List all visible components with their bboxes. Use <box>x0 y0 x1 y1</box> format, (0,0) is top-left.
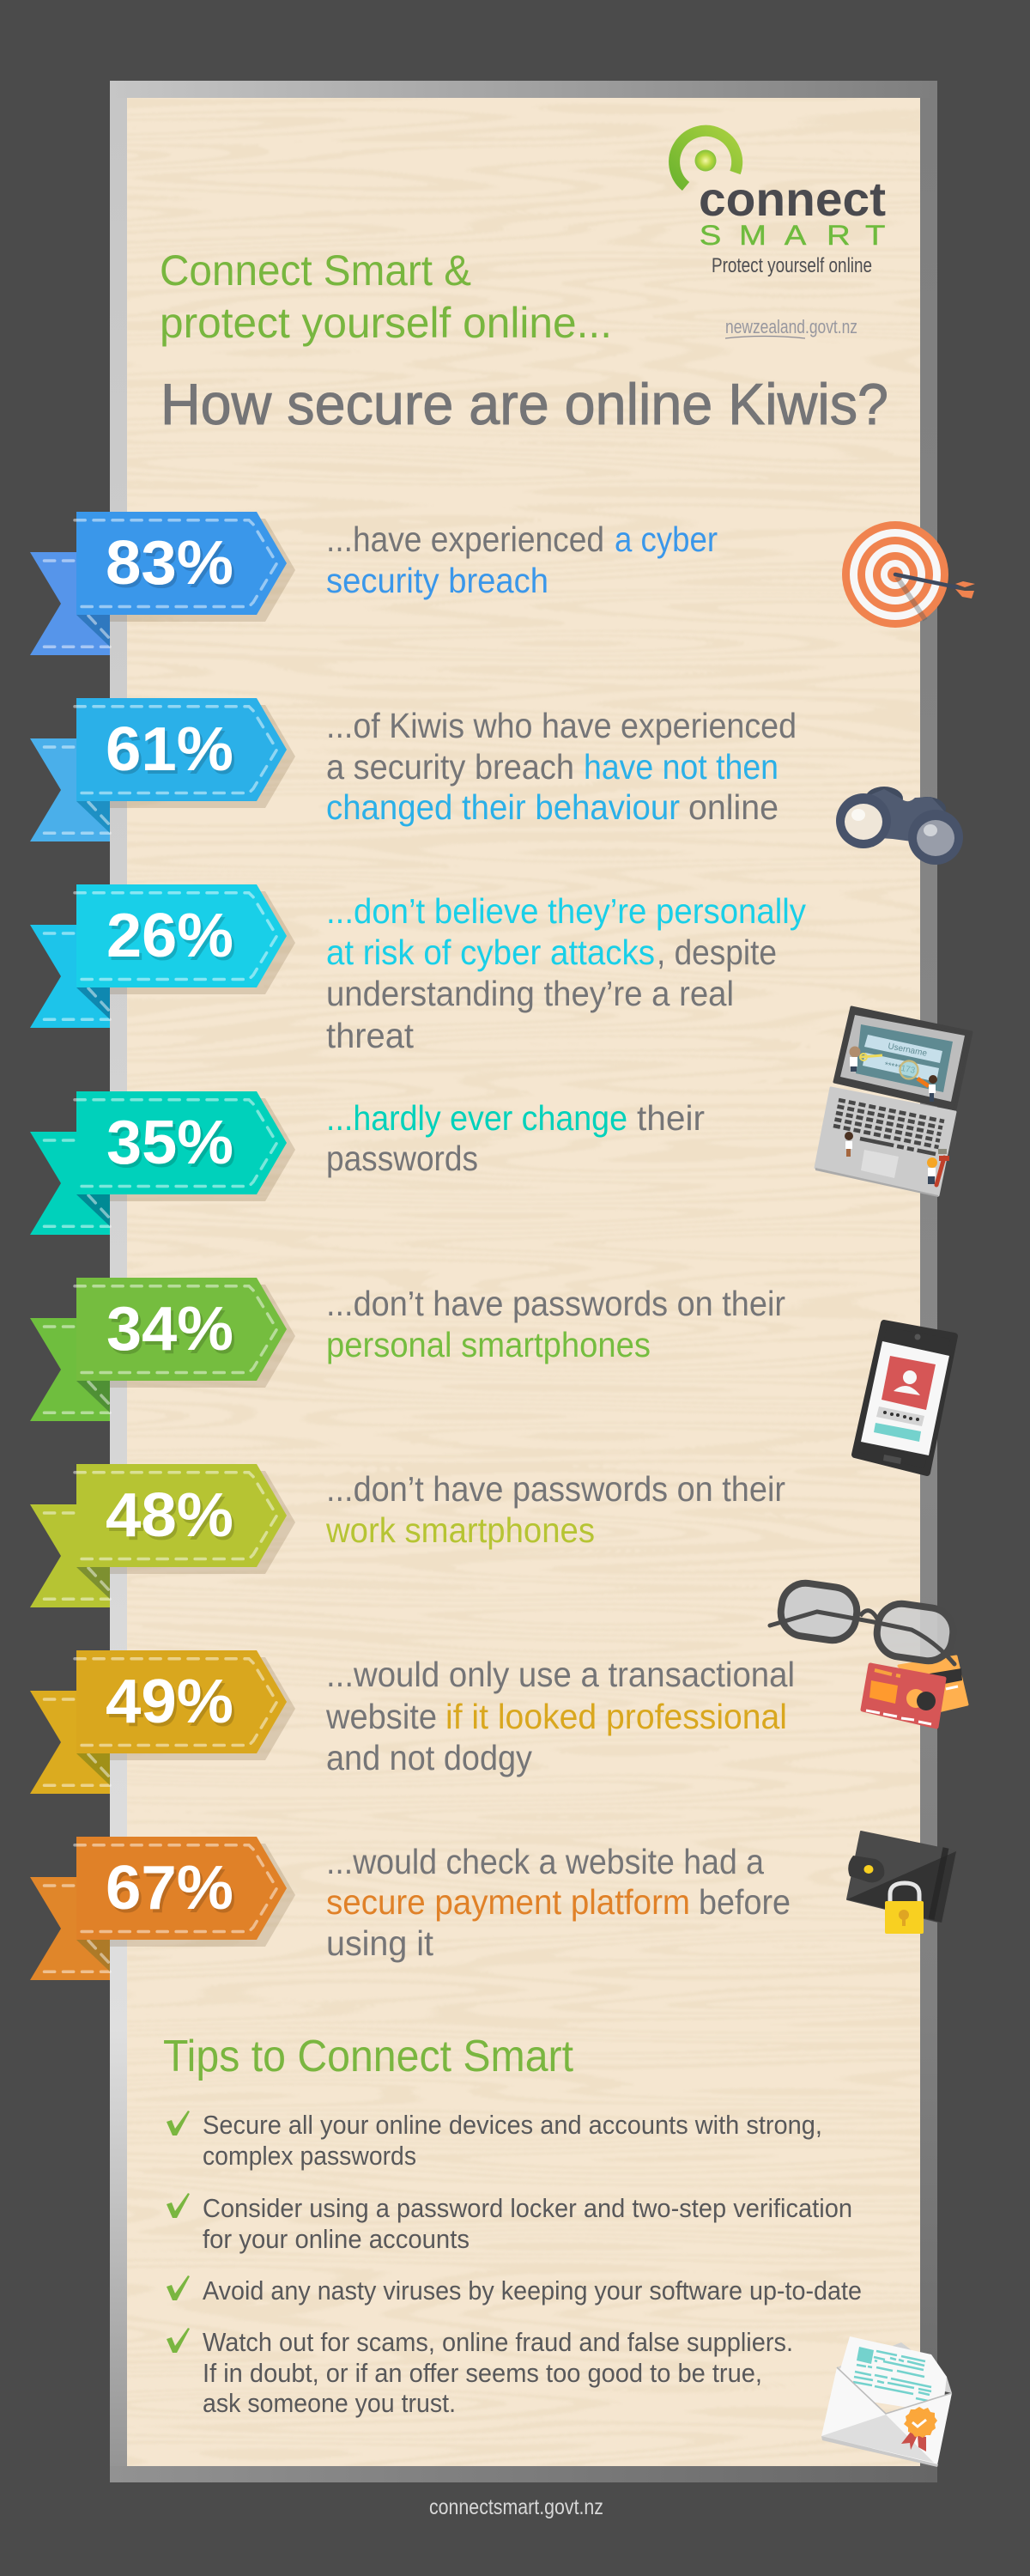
logo: Connect Smart <box>675 131 886 277</box>
ribbon: 67% <box>30 1837 295 1980</box>
frame <box>110 81 937 2482</box>
statement: 83%: ...have experienced <box>326 519 604 559</box>
intro heading <box>160 246 612 347</box>
footer link: connectsmart.govt.nz <box>429 2495 603 2519</box>
tips list <box>167 2110 862 2418</box>
statement: 26%: , despite <box>657 933 777 972</box>
tip 1 <box>167 2110 822 2171</box>
statement: 67%: ...would check a website had a <box>326 1842 764 1881</box>
tip 4: If in doubt, or if an offer seems too good to be true, <box>203 2358 762 2388</box>
ribbon: 35%: 35% <box>106 1109 233 1177</box>
ribbon: 48% <box>30 1464 295 1607</box>
statement: 48%: work smartphones <box>325 1510 595 1550</box>
statement: 34% <box>326 1284 785 1364</box>
statement: 26%: ...don’t believe they’re personally <box>326 891 806 931</box>
statement: 61%: have not then <box>584 747 779 787</box>
icon: laptop: *****173 <box>883 1060 916 1076</box>
ribbon: 49%: 49% <box>106 1668 233 1736</box>
wood panel <box>127 98 920 2466</box>
statement: 26%: understanding they’re a real <box>326 974 734 1013</box>
title: How secure are online Kiwis? <box>161 372 888 437</box>
statement: 61%: changed their behaviour <box>326 787 680 827</box>
statement: 35% <box>326 1098 705 1178</box>
intro heading: protect yourself online... <box>160 299 612 347</box>
ribbon: 48%: 48% <box>106 1481 233 1550</box>
laptop screen <box>834 1007 972 1109</box>
statement: 26% <box>326 891 806 1055</box>
statement: 61% <box>326 706 797 827</box>
tip 1: complex passwords <box>203 2141 416 2171</box>
laptop keyboard <box>833 1100 944 1154</box>
tip 3: Avoid any nasty viruses by keeping your software up-to-date <box>203 2275 862 2306</box>
tiny people <box>850 1046 860 1058</box>
tip 2 <box>167 2193 852 2254</box>
tip 2: for your online accounts <box>203 2224 470 2254</box>
statement: 61%: online <box>688 787 779 827</box>
statement: 67%: secure payment platform <box>326 1882 690 1922</box>
ribbon: 34% <box>30 1278 295 1421</box>
statement: 26%: at risk of cyber attacks <box>326 933 655 972</box>
tip 4: ask someone you trust. <box>203 2388 456 2418</box>
intro heading: Connect Smart & <box>160 246 471 295</box>
icon: target with arrow <box>842 521 975 628</box>
statement: 67%: before <box>699 1882 791 1922</box>
icon: logo arc and dot <box>675 131 737 186</box>
government link: newzealand.govt.nz <box>725 316 857 337</box>
ribbon: 35% <box>30 1091 295 1235</box>
ribbon: 83%: 83% <box>106 529 233 598</box>
icon: laptop <box>815 1007 972 1197</box>
statement: 49%: and not dodgy <box>326 1738 532 1777</box>
icon: wallet with padlock <box>847 1832 956 1934</box>
statement: 83% <box>326 519 718 600</box>
logo: Connect Smart: SMART <box>700 221 885 251</box>
statement: 49% <box>325 1655 795 1777</box>
statement: 34%: ...don’t have passwords on their <box>326 1284 785 1323</box>
logo: Connect Smart: Protect yourself online <box>712 254 872 277</box>
ribbon: 26% <box>30 884 295 1028</box>
laptop base <box>815 1088 955 1195</box>
tip 2: Consider using a password locker and two-step verification <box>203 2193 852 2223</box>
ribbon: 34%: 34% <box>106 1295 233 1364</box>
statement: 35%: ...hardly ever change <box>326 1098 627 1138</box>
statement: 61%: a security breach <box>326 747 574 787</box>
icon: envelope with seal <box>821 2336 952 2467</box>
ribbon: 61%: 61% <box>106 715 233 784</box>
ribbon: 83% <box>30 512 295 655</box>
statement: 67%: using it <box>326 1923 434 1963</box>
ribbon: 61% <box>30 698 295 841</box>
tip 1: Secure all your online devices and accounts with strong, <box>203 2110 822 2140</box>
tip 4: Watch out for scams, online fraud and false suppliers. <box>203 2327 793 2357</box>
statement: 35%: passwords <box>326 1139 478 1178</box>
statement: 34%: personal smartphones <box>326 1325 651 1364</box>
icon: laptop: Username <box>887 1042 928 1059</box>
statement: 67% <box>326 1842 791 1963</box>
icon: credit cards <box>863 1656 967 1727</box>
icon: smartphone <box>855 1323 954 1473</box>
statement: 49%: website <box>325 1697 437 1736</box>
statement: 48% <box>325 1469 785 1550</box>
tips heading: Tips to Connect Smart <box>163 2032 574 2081</box>
statement: 49%: if it looked professional <box>445 1697 787 1736</box>
ribbon: 49% <box>30 1650 295 1794</box>
ribbon: 67%: 67% <box>106 1854 233 1923</box>
statement: 35%: their <box>637 1098 705 1138</box>
tip 4 <box>167 2327 793 2418</box>
statement: 49%: ...would only use a transactional <box>326 1655 795 1694</box>
logo: Connect Smart: connect <box>699 172 886 226</box>
statement: 83%: a cyber <box>615 519 718 559</box>
statement: 48%: ...don’t have passwords on their <box>326 1469 785 1509</box>
icon: binoculars <box>836 787 963 865</box>
statement: 26%: threat <box>326 1016 415 1055</box>
statement: 61%: ...of Kiwis who have experienced <box>326 706 797 745</box>
statement: 83%: security breach <box>326 561 548 600</box>
icon: glasses <box>770 1580 956 1664</box>
ribbon: 26%: 26% <box>106 902 233 970</box>
